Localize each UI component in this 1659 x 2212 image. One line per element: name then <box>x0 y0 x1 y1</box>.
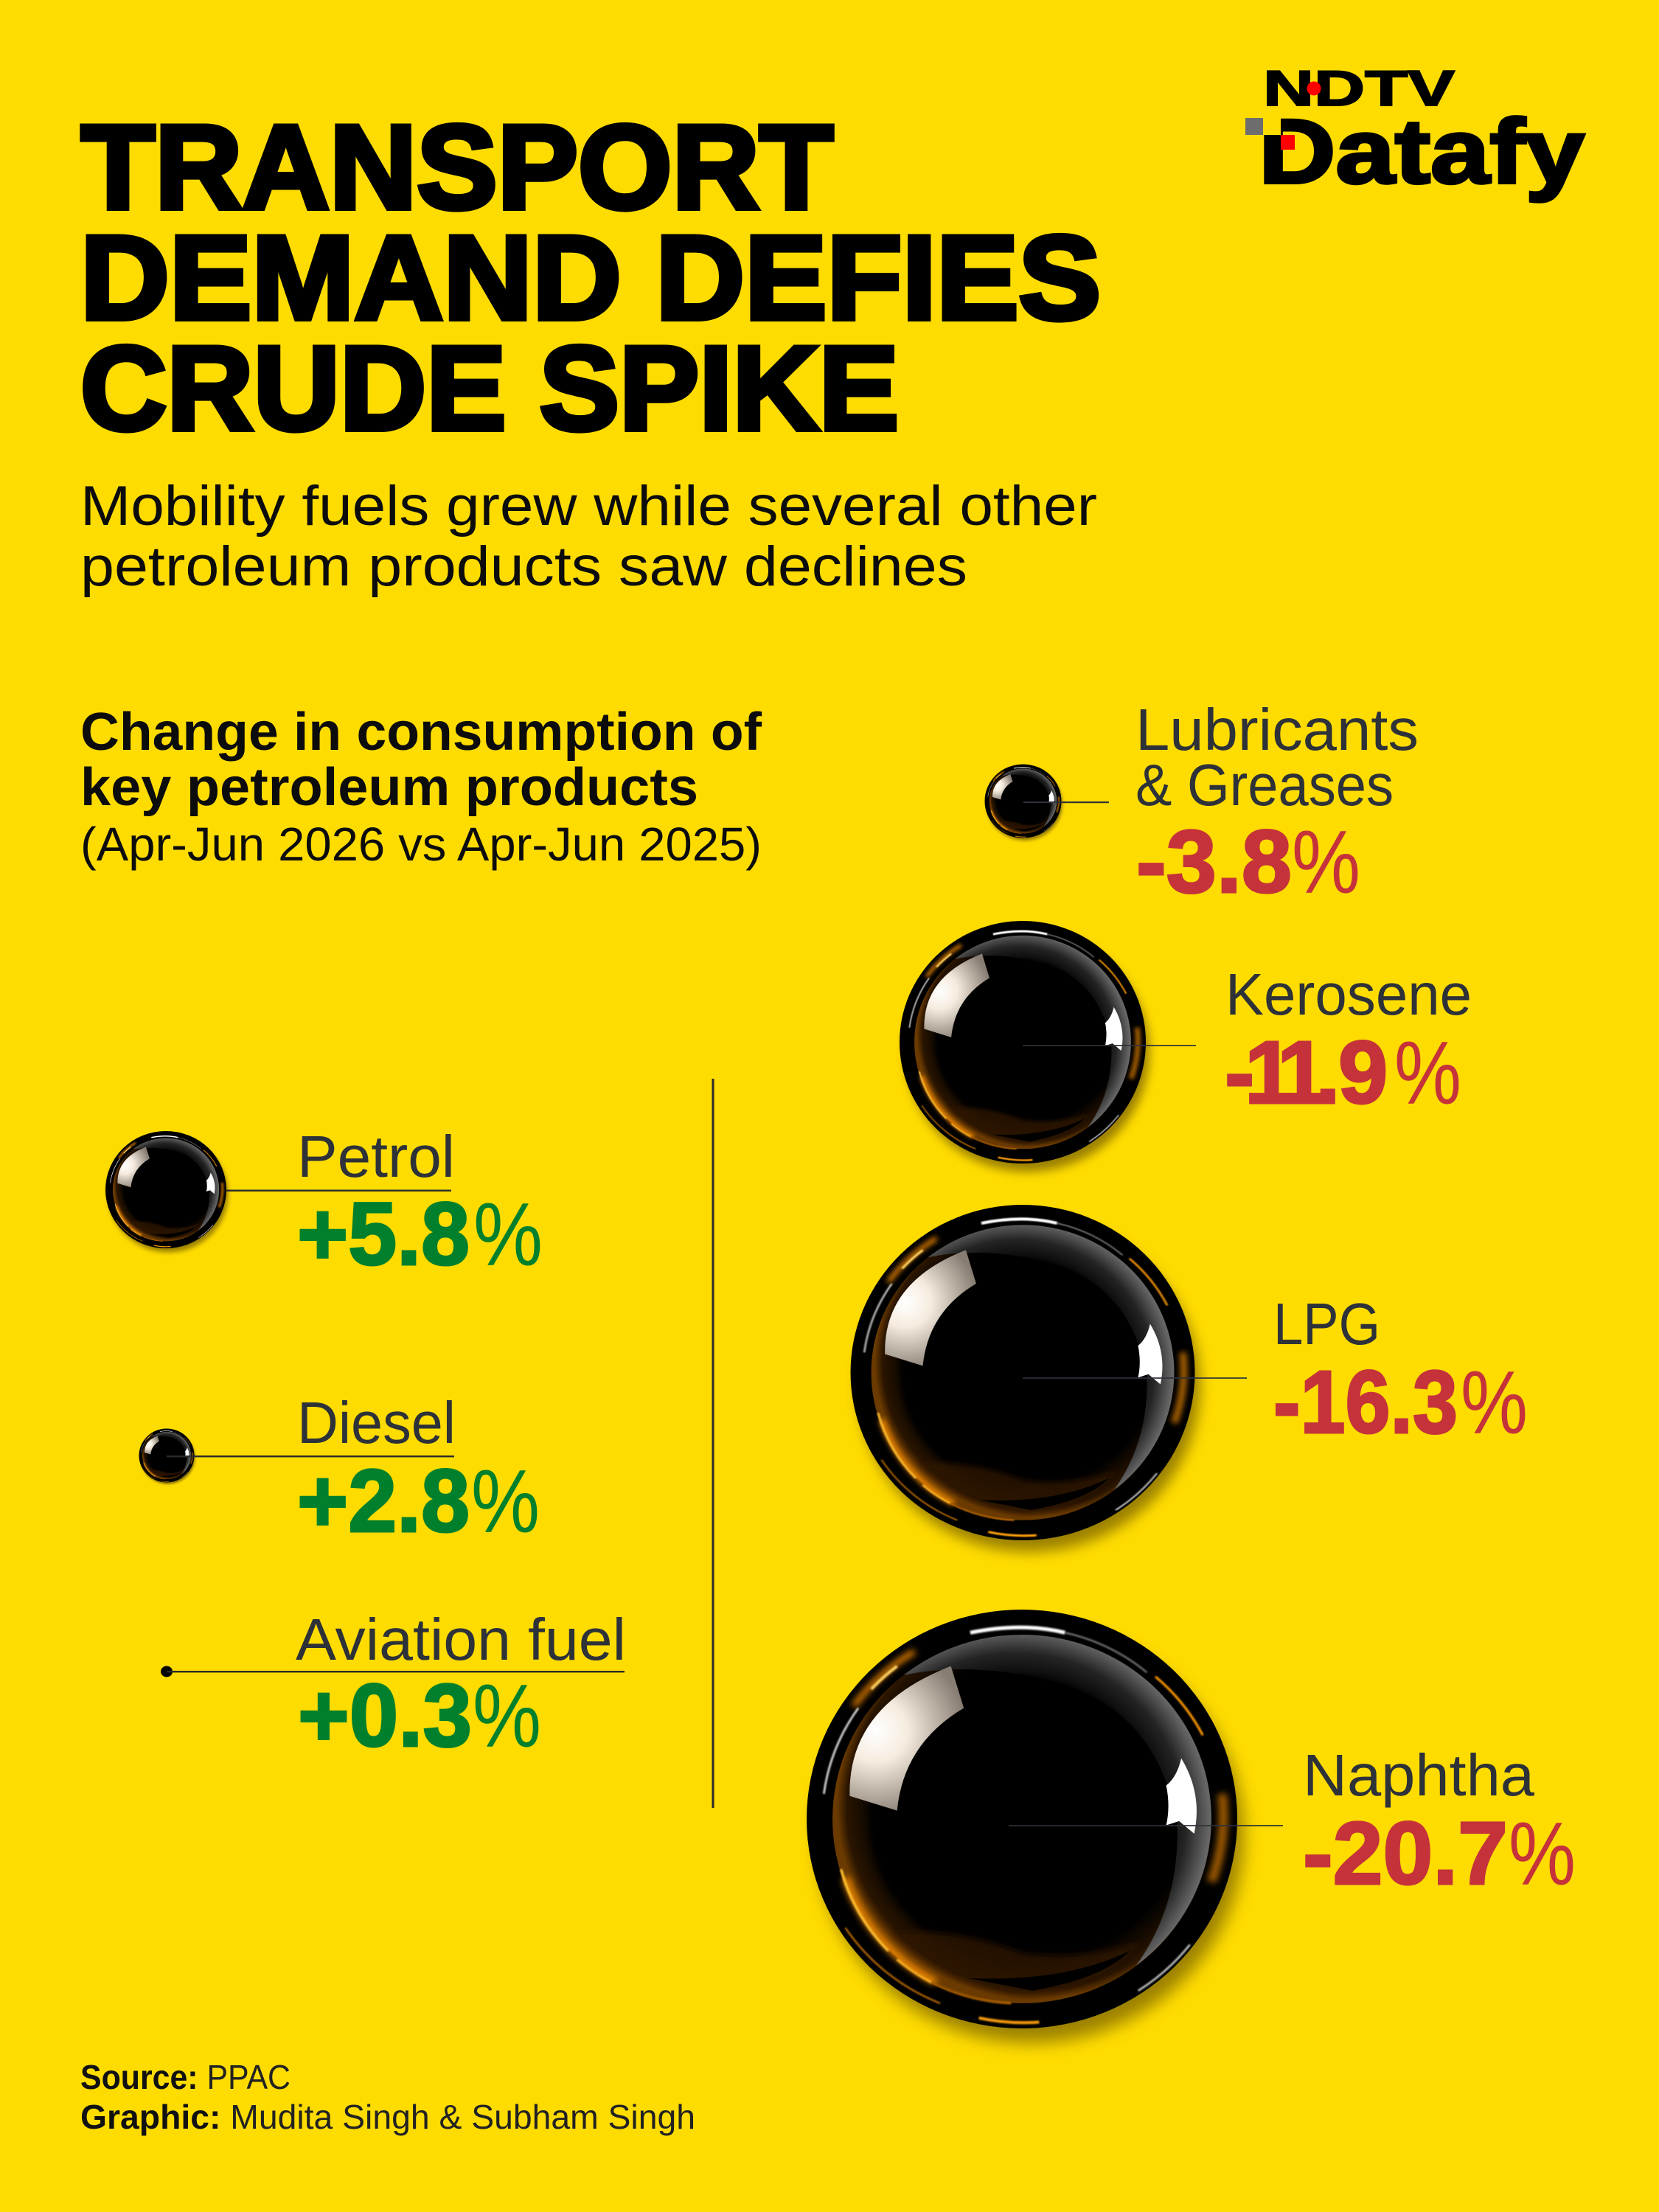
title: TRANSPORT <box>81 100 833 234</box>
panel: Lubricants & Greases <box>985 697 1419 912</box>
leader line: Lubricants <box>1023 801 1109 803</box>
label: LPG: LPG <box>1273 1291 1380 1357</box>
value: Aviation fuel: % <box>473 1666 541 1766</box>
value: Lubricants: % <box>1292 812 1360 912</box>
panel: Petrol <box>105 1124 543 1284</box>
value: LPG: % <box>1461 1352 1528 1453</box>
icon: Petrol oil drop <box>105 1131 228 1253</box>
chart heading: Change in consumption of <box>80 703 762 762</box>
value: Kerosene: -11.9 <box>1225 1022 1388 1122</box>
source and credits: Graphic: Mudita Singh & Subham Singh <box>80 2098 695 2136</box>
title: CRUDE SPIKE <box>80 321 899 456</box>
leader line: Diesel <box>167 1455 454 1457</box>
label: Lubricants & Greases: Lubricants <box>1135 697 1419 762</box>
subtitle: Mobility fuels grew while several other <box>80 475 1097 538</box>
value: LPG: -16.3 <box>1273 1352 1458 1452</box>
icon: Aviation fuel oil drop <box>161 1666 173 1677</box>
value: Aviation fuel: +0.3 <box>298 1665 472 1765</box>
label: Petrol: Petrol <box>297 1124 455 1189</box>
leader line: Aviation fuel <box>167 1671 625 1672</box>
icon: LPG oil drop <box>851 1205 1200 1552</box>
icon: Kerosene oil drop <box>900 921 1150 1172</box>
value: Naphtha: -20.7 <box>1303 1803 1508 1903</box>
logo: NDTV Datafy: NDTV <box>1263 60 1455 116</box>
label: Aviation fuel: Aviation fuel <box>296 1607 626 1672</box>
divider between gainers and decliners <box>712 1079 714 1808</box>
title: DEMAND DEFIES <box>80 211 1101 345</box>
subtitle <box>80 475 1097 598</box>
logo: NDTV Datafy: Datafy <box>1259 101 1585 203</box>
value: Diesel: +2.8 <box>297 1450 470 1551</box>
chart heading: key petroleum products <box>80 758 698 817</box>
panel: Diesel <box>139 1390 540 1551</box>
value: Petrol: % <box>473 1184 543 1284</box>
chart heading <box>80 703 762 871</box>
panel: Naphtha <box>807 1610 1576 2043</box>
icon: Diesel oil drop <box>139 1429 195 1484</box>
value: Lubricants <box>1136 811 1360 912</box>
source and credits: Source: PPAC <box>80 2058 291 2096</box>
leader line: Kerosene <box>1023 1045 1196 1046</box>
title <box>80 100 1101 456</box>
logo: NDTV Datafy <box>1245 60 1585 203</box>
value: Naphtha: % <box>1509 1804 1576 1904</box>
label: Kerosene: Kerosene <box>1225 961 1472 1027</box>
label: Lubricants & Greases <box>1135 697 1419 818</box>
value: Lubricants: -3.8 <box>1136 811 1292 911</box>
leader line: Petrol <box>226 1190 451 1192</box>
panel: Kerosene <box>900 921 1472 1172</box>
subtitle: petroleum products saw declines <box>80 535 967 598</box>
label: Lubricants & Greases: & Greases <box>1135 752 1394 818</box>
leader line: Naphtha <box>1009 1825 1283 1826</box>
label: Diesel: Diesel <box>297 1390 456 1455</box>
icon: Naphtha oil drop <box>807 1610 1244 2043</box>
value: Kerosene <box>1225 1022 1461 1123</box>
source and credits <box>80 2058 695 2136</box>
value: Petrol: +5.8 <box>297 1183 470 1284</box>
value: Kerosene: % <box>1394 1023 1461 1123</box>
leader line: LPG <box>1023 1377 1247 1379</box>
label: Naphtha: Naphtha <box>1303 1742 1535 1808</box>
value: Diesel: % <box>471 1451 540 1551</box>
panel: Aviation fuel <box>161 1607 626 1766</box>
icon: Lubricants oil drop <box>985 764 1062 841</box>
panel: LPG <box>851 1205 1528 1552</box>
chart heading: (Apr-Jun 2026 vs Apr-Jun 2025) <box>80 818 762 871</box>
